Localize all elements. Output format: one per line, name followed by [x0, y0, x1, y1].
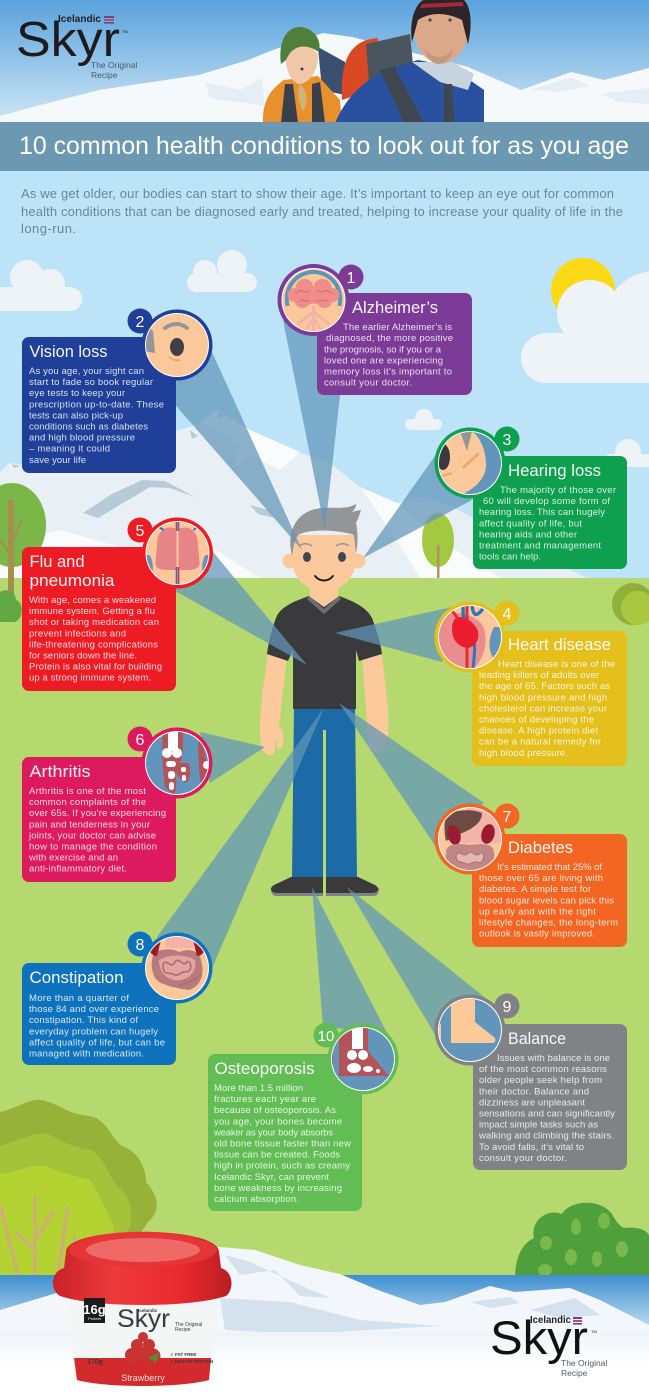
badge 6: 6: [136, 732, 145, 749]
bush right: [612, 583, 649, 625]
text: Arthritis body: joints, your doctor can advise: [28, 830, 156, 841]
text: Vision loss body: conditions such as diabetes: [29, 422, 148, 432]
pot lid: [53, 1232, 231, 1305]
panel: Diabetes: [434, 804, 627, 947]
panel: Flu and pneumonia: [22, 518, 213, 691]
badge 2: [128, 308, 152, 334]
icon: ear: [434, 428, 506, 498]
heading: Arthritis: Arthritis: [30, 763, 90, 781]
text: Flu and pneumonia body: [29, 595, 162, 684]
pot protein tag: 16g: [83, 1302, 106, 1317]
background sky: [0, 171, 649, 579]
text: Balance body: walking and climbing the stairs.: [478, 1131, 614, 1142]
pot red band: [74, 1358, 211, 1386]
text: Heart disease body: the age of 65. Factors such as: [479, 681, 610, 692]
panel: Arthritis: [22, 726, 212, 882]
big tree bottom left: [0, 1100, 157, 1278]
text: Flu and pneumonia body: prevent infections and: [29, 628, 126, 639]
figure: shoes: [271, 877, 379, 896]
badge 4: [494, 600, 520, 626]
mountain background: [0, 410, 587, 578]
text: Alzheimer's body: loved one are experiencing: [324, 355, 443, 366]
text: Diabetes body: up early and with the right: [479, 906, 596, 917]
text: Hearing loss body: [479, 485, 616, 563]
figure: collar: [307, 596, 341, 614]
text: Arthritis body: over 65s. If you’re experiencing: [29, 808, 166, 819]
logo: Skyr top: The Original: [91, 60, 137, 70]
text: Hearing loss body: affect quality of life, but: [479, 518, 582, 529]
text: Arthritis body: with exercise and an: [28, 853, 118, 864]
text: Osteoporosis body: fractures each year are: [214, 1094, 316, 1105]
text: Vision loss body: As you age, your sight can: [29, 366, 144, 377]
intro text: health conditions that can be diagnosed early and treated, helping to increase your quality of life in the: [21, 204, 623, 219]
logo: Skyr bottom: The Original: [561, 1358, 607, 1368]
text: Alzheimer's body: the prognosis, so if you or a: [324, 344, 442, 355]
text: Arthritis body: anti-inflammatory diet.: [29, 864, 127, 875]
pot label text: 170g: [87, 1359, 103, 1366]
text: Flu and pneumonia body: Protein is also vital for building: [29, 662, 162, 673]
text: Osteoporosis body: bone weakness by increasing: [214, 1183, 342, 1194]
icon: eye: [142, 310, 212, 380]
footer photo: sky and snowy mountains: [0, 1247, 649, 1400]
pot label text: Icelandic: [138, 1308, 158, 1313]
title banner: [0, 122, 649, 171]
figure: arms: [260, 655, 389, 756]
pot body: [68, 1295, 217, 1382]
text: Hearing loss body: The majority of those over: [500, 485, 616, 496]
text: Heart disease body: leading killers of adults over: [479, 670, 599, 681]
text: Osteoporosis body: you age, your bones become: [214, 1116, 342, 1127]
text: Flu and pneumonia body: for seniors down the line.: [29, 650, 137, 662]
badge 1: 1: [347, 270, 356, 287]
intro text: As we get older, our bodies can start to show their age. It’s important to keep an eye out for common: [21, 186, 614, 201]
badge 8: [128, 932, 152, 956]
logo: Skyr bottom: Skyr: [490, 1311, 588, 1364]
text: Flu and pneumonia body: With age, comes a weakened: [29, 595, 156, 606]
logo: Skyr bottom: TM: [591, 1329, 597, 1334]
text: Osteoporosis body: weaker as your body absorbs: [213, 1127, 333, 1138]
text: Flu and pneumonia body: life-threatening complications: [29, 639, 158, 650]
text: Hearing loss body: treatment and management: [479, 540, 601, 552]
text: Constipation body: constipation. This kind of: [29, 1015, 138, 1026]
text: Osteoporosis body: old bone tissue faster than new: [214, 1138, 351, 1150]
text: Arthritis body: how to manage the condition: [29, 842, 157, 852]
text: Constipation body: everyday problem can hugely: [29, 1026, 158, 1037]
text: Hearing loss body: hearing loss. This can hugely: [479, 507, 605, 518]
text: Diabetes body: lifestyle changes, the long-term: [479, 918, 618, 928]
pot label text: The Original: [175, 1322, 202, 1328]
text: Heart disease body: disease. A high protein diet: [479, 726, 598, 737]
bush bottom right: [515, 1203, 649, 1276]
heading: Osteoporosis: Osteoporosis: [214, 1060, 314, 1078]
text: Heart disease body: chances of developing the: [479, 714, 594, 726]
logo: Skyr top: Recipe: [91, 70, 118, 80]
heading: Diabetes: Diabetes: [508, 839, 573, 857]
heading: Hearing loss: Hearing loss: [508, 462, 601, 480]
heading: Vision loss: Vision loss: [30, 343, 108, 361]
figure: shirt: [267, 596, 382, 709]
text: Alzheimer's body: The earlier Alzheimer’s is: [343, 322, 452, 333]
text: Diabetes body: those over 65 are living with: [479, 873, 603, 884]
text: Alzheimer's body: memory loss it’s important to: [324, 366, 452, 378]
text: Osteoporosis body: [213, 1083, 351, 1205]
heading: Heart disease: Heart disease: [508, 636, 611, 654]
icon: foot: [434, 994, 506, 1066]
logo: Skyr top: Icelandic: [58, 13, 101, 25]
text: Vision loss body: tests can also pick-up: [29, 410, 123, 421]
header people: man hiker: [335, 0, 484, 123]
badge 2: 2: [136, 314, 145, 331]
heading: Flu and pneumonia: Flu and: [30, 553, 84, 571]
text: Flu and pneumonia body: immune system. Getting a flu: [29, 606, 155, 617]
intro text: long-run.: [21, 221, 76, 236]
text: Flu and pneumonia body: shot or taking medication can: [29, 617, 159, 628]
text: Heart disease body: Heart disease is one of the: [498, 659, 615, 670]
text: Arthritis body: [28, 786, 166, 875]
text: Constipation body: More than a quarter of: [29, 993, 129, 1004]
icon: lungs: [142, 518, 213, 588]
badge 7: 7: [503, 809, 512, 826]
icon: hand joints: [142, 728, 212, 798]
text: Vision loss body: [29, 366, 164, 466]
text: Constipation body: managed with medication.: [29, 1048, 144, 1060]
text: Osteoporosis body: More than 1.5 million: [214, 1083, 303, 1094]
text: Vision loss body: save your life: [29, 455, 86, 466]
logo: Skyr bottom: [490, 1311, 607, 1378]
logo: Skyr bottom: Icelandic: [530, 1315, 571, 1326]
text: Hearing loss body: hearing aids and other: [479, 529, 577, 540]
icon: intestines: [142, 932, 212, 1004]
logo: Skyr top: Skyr: [16, 13, 120, 67]
text: Diabetes body: It’s estimated that 25% of: [497, 862, 602, 873]
text: Balance body: To avoid falls, it’s vital to: [479, 1142, 584, 1153]
text: Heart disease body: [479, 659, 615, 759]
light beams from body to condition icons: [150, 320, 488, 1043]
pot strawberries: [125, 1332, 160, 1366]
pot label text: Skyr: [117, 1305, 170, 1333]
panel: Balance: [434, 994, 627, 1170]
icon: brain: [278, 264, 350, 336]
text: Osteoporosis body: tissue can be created. Foods: [214, 1150, 340, 1161]
badge 6: [128, 726, 152, 752]
heading: Flu and pneumonia: [30, 553, 115, 590]
text: Vision loss body: prescription up-to-date. These: [29, 399, 164, 410]
badge 10: [314, 1022, 338, 1048]
icon: abdominal organs: [434, 804, 506, 874]
pot protein tag: Protein: [88, 1316, 101, 1321]
badge 1: [338, 264, 364, 290]
text: Arthritis body: common complaints of the: [29, 797, 146, 808]
header photo: sky and snowy mountains: [0, 0, 649, 123]
badge 5: 5: [136, 523, 145, 540]
text: Vision loss body: start to fade so book regular: [29, 377, 153, 388]
text: Heart disease body: cholesterol can increase your: [479, 703, 607, 714]
text: Diabetes body: outlook is vastly improved.: [479, 929, 595, 940]
heading: Constipation: Constipation: [30, 969, 124, 987]
text: Constipation body: affect quality of life, but can be: [29, 1037, 165, 1048]
header people: woman hiker: [263, 27, 345, 123]
panel: Hearing loss: [434, 426, 627, 569]
badge 8: 8: [136, 937, 145, 954]
title banner: 10 common health conditions to look out for as you age: [19, 132, 629, 160]
panel: Osteoporosis: [208, 1022, 398, 1211]
text: Alzheimer's body: [324, 322, 453, 389]
figure: older man: [260, 504, 389, 896]
badge 9: [494, 994, 520, 1018]
intro text: [21, 186, 623, 236]
pot label text: ✓ FAT FREE: [170, 1352, 196, 1357]
badge 5: [128, 518, 152, 542]
product: Skyr strawberry pot: [53, 1232, 231, 1386]
text: Hearing loss body: tools can help.: [479, 552, 541, 563]
text: Osteoporosis body: high in protein, such as creamy: [214, 1161, 350, 1172]
badge 3: 3: [503, 432, 512, 449]
text: Alzheimer's body: consult your doctor.: [324, 378, 412, 389]
text: Constipation body: [29, 993, 165, 1060]
logo: Skyr top: TM: [122, 29, 128, 34]
text: Osteoporosis body: because of osteoporosis. As: [214, 1105, 336, 1116]
text: Balance body: [478, 1053, 615, 1164]
pot label text: [87, 1305, 213, 1366]
text: Flu and pneumonia body: up a strong immune system.: [29, 673, 151, 684]
text: Constipation body: those 84 and over experience: [29, 1004, 159, 1015]
text: Diabetes body: blood sugar levels can pick this: [479, 895, 614, 906]
text: Vision loss body: and high blood pressure: [29, 433, 135, 444]
tree left: [0, 483, 46, 622]
text: Heart disease body: high blood pressure.: [479, 748, 568, 759]
pot label text: ✓ HIGH IN PROTEIN: [170, 1359, 213, 1364]
text: Heart disease body: can be a natural remedy for: [479, 737, 601, 748]
text: Balance body: of the most common reasons: [479, 1064, 607, 1075]
text: Diabetes body: diabetes. A simple test for: [479, 884, 591, 895]
badge 9: 9: [503, 999, 512, 1016]
tree right: [422, 473, 454, 578]
text: Hearing loss body: 60 will develop some form of: [483, 496, 610, 507]
text: Balance body: older people seek help from: [479, 1075, 602, 1086]
pot label text: Recipe: [175, 1327, 191, 1333]
figure: neck: [310, 585, 338, 607]
icon: foot bones: [328, 1024, 398, 1094]
badge 3: [494, 426, 520, 452]
heading: Alzheimer's: Alzheimer’s: [352, 299, 438, 317]
text: Balance body: sensations and can significantly: [479, 1108, 615, 1120]
heading: Balance: Balance: [508, 1030, 566, 1048]
panel: Vision loss: [22, 308, 212, 473]
text: Vision loss body: eye tests to keep your: [29, 388, 125, 399]
text: Osteoporosis body: Icelandic Skyr, can prevent: [214, 1172, 329, 1183]
text: Diabetes body: [479, 862, 618, 940]
badge 7: [494, 804, 520, 828]
panel: Alzheimer's: [278, 264, 472, 395]
text: Balance body: impact simple tasks such as: [479, 1120, 598, 1131]
logo: Skyr bottom: Recipe: [561, 1368, 588, 1378]
text: Osteoporosis body: calcium absorption.: [214, 1194, 299, 1205]
text: Heart disease body: high blood pressure and high: [479, 692, 607, 703]
pot protein tag: [83, 1298, 106, 1323]
text: Alzheimer's body: diagnosed, the more positive: [326, 333, 453, 344]
text: Vision loss body: – meaning it could: [29, 444, 110, 455]
text: Balance body: their doctor. Balance and: [479, 1086, 589, 1097]
panel: Heart disease: [434, 600, 627, 766]
badge 4: 4: [503, 606, 512, 623]
pot flavour name: Strawberry: [121, 1373, 165, 1383]
text: Arthritis body: pain and tenderness in your: [29, 819, 150, 830]
logo: Skyr top: [16, 13, 137, 80]
icon: heart: [434, 602, 506, 672]
figure: trousers: [292, 705, 357, 878]
figure: head: [282, 504, 366, 592]
badge 10: 10: [318, 1028, 334, 1045]
text: Arthritis body: Arthritis is one of the most: [29, 786, 146, 797]
panel: Constipation: [22, 932, 212, 1065]
text: Balance body: consult your doctor.: [479, 1153, 567, 1164]
background ground: [0, 578, 649, 1278]
heading: Flu and pneumonia: pneumonia: [30, 572, 115, 590]
text: Balance body: Issues with balance is one: [497, 1053, 610, 1064]
clouds and sun: [0, 250, 649, 467]
text: Balance body: dizziness are unpleasant: [479, 1097, 585, 1108]
